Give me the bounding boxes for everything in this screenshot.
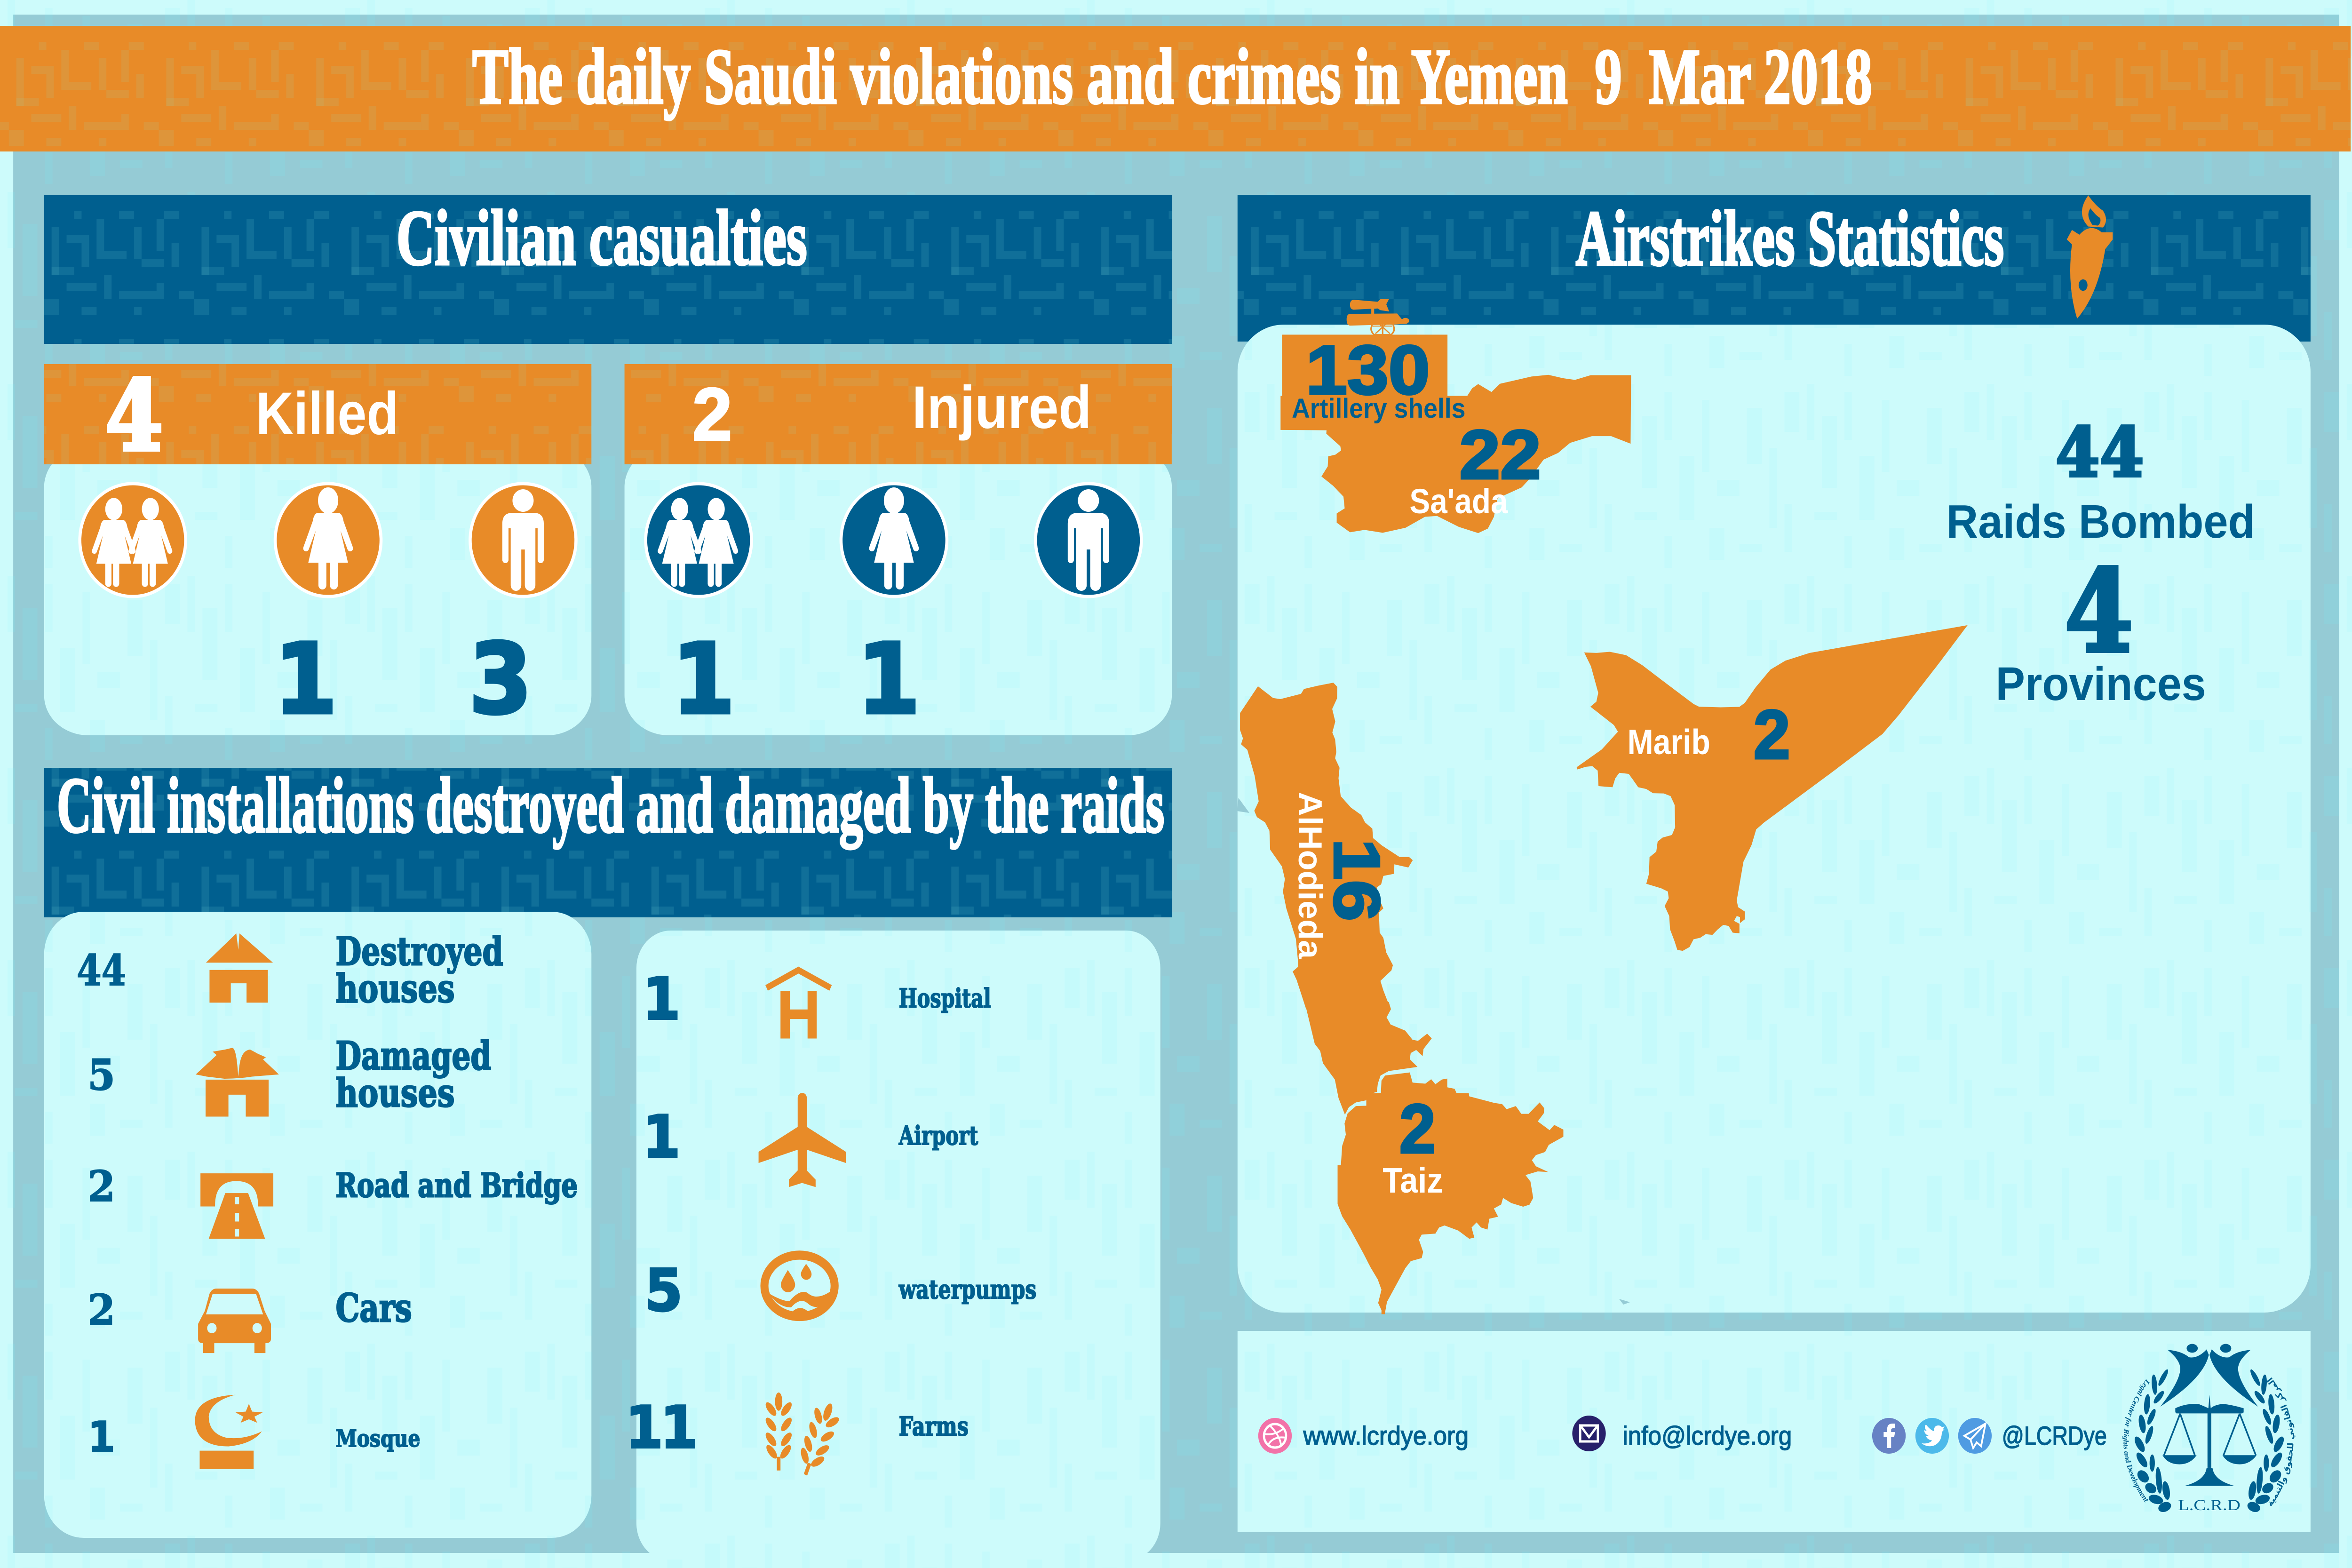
- icon: email: [1572, 1416, 1606, 1451]
- icon: missile: [2067, 195, 2113, 318]
- heading: civil installations: [44, 762, 1172, 917]
- row: damaged houses: 5: [87, 1050, 115, 1100]
- row: destroyed houses: [77, 929, 503, 1011]
- injured counts: 1: [857, 623, 920, 736]
- panel: injured: [625, 364, 1172, 736]
- row: destroyed houses: Destroyed: [335, 929, 503, 974]
- AlHodieda name: AlHodieda: [1292, 792, 1328, 959]
- logo: LCRD: [2122, 1344, 2296, 1514]
- row: mosque: [87, 1395, 420, 1469]
- website text: www.lcrdye.org: [1303, 1421, 1469, 1450]
- logo: LCRD: L.C.R.D: [2178, 1496, 2241, 1513]
- map: Marib: [1577, 625, 1968, 951]
- panel: footer contact: [1238, 1331, 2311, 1532]
- row: damaged houses: Damaged: [335, 1033, 491, 1079]
- killed counts: 1: [274, 623, 337, 736]
- panel: installations list left: [44, 912, 591, 1538]
- Sa'ada count: 22: [1459, 416, 1541, 493]
- Marib name: Marib: [1628, 723, 1710, 762]
- map: Taiz: [1338, 1073, 1563, 1314]
- AlHodieda count: 16: [1320, 839, 1393, 921]
- row: hospital: [643, 966, 991, 1039]
- row: airport: 1: [643, 1104, 680, 1171]
- heading: airstrikes statistics: Airstrikes Statistics: [1576, 195, 2004, 282]
- row: road and bridge: Road and Bridge: [335, 1166, 578, 1205]
- row: road and bridge: [87, 1161, 578, 1239]
- row: farms: 11: [625, 1394, 698, 1462]
- injured counts: [672, 623, 920, 736]
- icon: man injured: [1035, 484, 1141, 597]
- killed header bar: [44, 364, 591, 464]
- injured panel background: [625, 447, 1172, 735]
- stat: provinces: Provinces: [1995, 657, 2206, 710]
- icon: cannon: [1347, 299, 1409, 334]
- icon: man killed: [470, 484, 576, 597]
- email text: info@lcrdye.org: [1622, 1421, 1792, 1450]
- heading: civil installations: Civil installations destroyed and damaged by the raids: [57, 762, 1164, 849]
- stat: raids bombed: [1946, 413, 2255, 548]
- stat: provinces: 4: [2065, 545, 2133, 678]
- Taiz name: Taiz: [1383, 1161, 1443, 1201]
- row: mosque: Mosque: [335, 1425, 420, 1452]
- row: destroyed houses: 44: [77, 945, 126, 995]
- killed total: 4: [105, 359, 163, 473]
- icon: telegram: [1958, 1418, 1992, 1454]
- Taiz count: 2: [1399, 1090, 1436, 1168]
- row: airport: Airport: [898, 1120, 978, 1151]
- icon: woman killed: [275, 484, 381, 597]
- panel: airstrikes map: [1237, 299, 2311, 1314]
- row: road and bridge: 2: [87, 1161, 115, 1211]
- row: waterpumps: 5: [645, 1258, 683, 1325]
- killed panel background: [44, 447, 591, 735]
- row: farms: [625, 1393, 969, 1481]
- logo: LCRD: Legal Center for Rights and Development: [2122, 1377, 2152, 1504]
- Marib count: 2: [1754, 696, 1790, 773]
- killed counts: [274, 623, 532, 736]
- icon: children killed: [80, 484, 186, 597]
- title text: The daily Saudi violations and crimes in Yemen 9 Mar 2018: [472, 33, 1872, 120]
- row: cars: Cars: [335, 1285, 412, 1331]
- icon: children injured: [646, 484, 752, 597]
- icon: woman injured: [841, 484, 947, 597]
- heading: civilian casualties: [44, 194, 1172, 344]
- row: cars: [87, 1285, 412, 1353]
- row: destroyed houses: houses: [335, 966, 455, 1011]
- injured header bar: [625, 364, 1172, 464]
- small sliver shapes: [1237, 798, 1249, 813]
- icon: facebook: [1872, 1418, 1906, 1454]
- injured label: Injured: [912, 374, 1091, 441]
- row: farms: Farms: [899, 1411, 969, 1441]
- icon: twitter: [1915, 1418, 1949, 1454]
- logo: LCRD: المركز القانوني للحقوق والتنمية: [2265, 1376, 2296, 1508]
- map: Sa'ada: [1280, 332, 1631, 533]
- social handle: @LCRDye: [2002, 1421, 2107, 1450]
- row: cars: 2: [87, 1285, 115, 1335]
- artillery count: 130: [1306, 332, 1430, 409]
- row: damaged houses: houses: [335, 1070, 455, 1116]
- title banner: [0, 26, 2351, 151]
- icon: website: [1258, 1418, 1292, 1454]
- small island: [1619, 1299, 1630, 1305]
- heading: civilian casualties: Civilian casualties: [397, 194, 807, 282]
- Sa'ada name: Sa'ada: [1409, 482, 1509, 521]
- stat: raids bombed: Raids Bombed: [1946, 495, 2255, 548]
- row: hospital: 1: [643, 966, 680, 1033]
- heading: airstrikes statistics: [1238, 195, 2311, 342]
- row: damaged houses: [87, 1033, 491, 1116]
- row: waterpumps: waterpumps: [898, 1274, 1036, 1305]
- stat: provinces: [1995, 545, 2206, 710]
- map: AlHodieda: [1240, 683, 1432, 1114]
- panel: killed: [44, 359, 591, 736]
- stat: raids bombed: 44: [2056, 413, 2144, 492]
- panel: installations list right: [625, 931, 1160, 1561]
- row: airport: [643, 1093, 978, 1187]
- killed label: Killed: [256, 380, 399, 447]
- injured counts: 1: [672, 623, 735, 736]
- artillery label: Artillery shells: [1292, 393, 1466, 423]
- killed counts: 3: [469, 623, 532, 736]
- injured total: 2: [692, 373, 732, 456]
- row: waterpumps: [645, 1255, 1036, 1325]
- row: hospital: Hospital: [899, 983, 991, 1013]
- row: mosque: 1: [87, 1412, 115, 1462]
